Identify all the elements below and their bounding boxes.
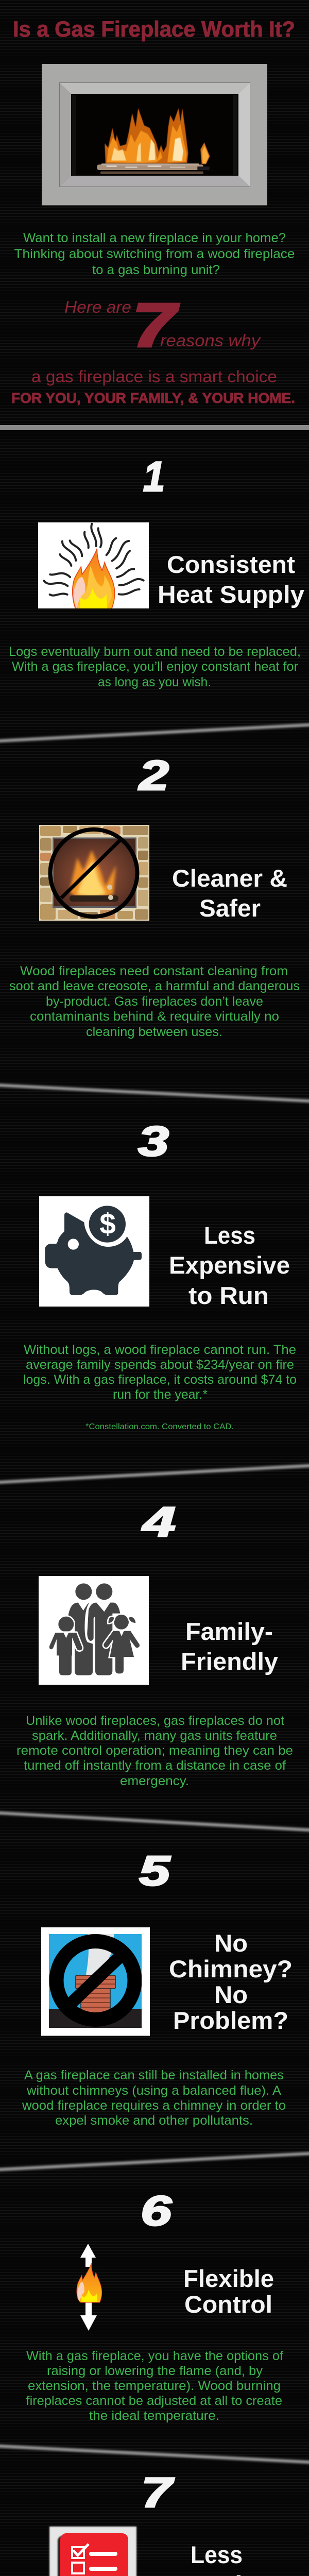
- icon: piggy bank: $: [99, 1208, 116, 1241]
- body text: by-product. Gas fireplaces don’t leave: [46, 994, 263, 1009]
- body text: extension, the temperature). Wood burning: [28, 2379, 281, 2393]
- body text: [16, 1714, 293, 1788]
- body text: Unlike wood fireplaces, gas fireplaces do not: [26, 1714, 284, 1728]
- heading: Less: [191, 2541, 243, 2568]
- body text: logs. With a gas fireplace, it costs around $74 to: [23, 1372, 297, 1387]
- panel: reason 6: [26, 2188, 283, 2423]
- body text: without chimneys (using a balanced flue). A: [26, 2083, 281, 2098]
- intro text: [14, 231, 295, 277]
- heading: Heat Supply: [158, 581, 304, 608]
- icon: family: [39, 1576, 149, 1685]
- subheading: smart choice: a gas fireplace is a smart choice: [31, 367, 277, 386]
- heading: Flexible: [183, 2265, 274, 2292]
- body text: emergency.: [120, 1774, 189, 1788]
- heading: Less: [204, 1222, 255, 1249]
- intro text: Thinking about switching from a wood fireplace: [14, 247, 295, 261]
- body text: the ideal temperature.: [89, 2409, 219, 2423]
- body text: contaminants behind & require virtually no: [30, 1009, 279, 1024]
- heading: No: [214, 1929, 248, 1957]
- body text: wood fireplace requires a chimney in order to: [22, 2098, 286, 2113]
- body text: Logs eventually burn out and need to be replaced,: [9, 645, 301, 659]
- body text: [23, 1343, 297, 1402]
- body text: remote control operation; meaning they can be: [16, 1743, 293, 1758]
- heading: Control: [184, 2291, 272, 2318]
- number 1: 1: [143, 453, 165, 500]
- panel: reason 1: [9, 453, 304, 689]
- title: Is a Gas Fireplace Worth It?: [13, 17, 295, 42]
- panel: reason 4: [16, 1499, 293, 1788]
- body text: With a gas fireplace, you’ll enjoy constant heat for: [12, 659, 298, 674]
- flames mid: [107, 124, 209, 163]
- icon: red checklist: [49, 2527, 136, 2576]
- heading: [158, 551, 304, 608]
- icon: piggy bank: [39, 1196, 149, 1307]
- intro text: Want to install a new fireplace in your home?: [23, 231, 286, 245]
- heading: Cleaner &: [172, 865, 287, 892]
- heading: [183, 2541, 250, 2576]
- number 7: 7: [141, 2469, 174, 2516]
- body text: expel smoke and other pollutants.: [55, 2113, 253, 2128]
- heading: [172, 865, 287, 922]
- body text: [9, 645, 301, 689]
- number 2: 2: [138, 752, 169, 799]
- body text: [26, 2349, 283, 2423]
- heading: [169, 1929, 293, 2034]
- heading: [169, 1222, 290, 1309]
- body text: as long as you wish.: [98, 675, 211, 689]
- heading: No: [214, 1981, 248, 2008]
- flames outer: [105, 108, 210, 164]
- heading: Consistent: [167, 551, 295, 578]
- heading: Friendly: [181, 1648, 278, 1675]
- footnote: *Constellation.com. Converted to CAD.: [85, 1422, 234, 1431]
- body text: spark. Additionally, many gas units feature: [32, 1728, 277, 1743]
- heading: Chimney?: [169, 1955, 293, 1982]
- icon: crossed-out wood fireplace: [39, 825, 149, 921]
- intro text: to a gas burning unit?: [92, 263, 220, 277]
- icon: flame with heat waves: [38, 522, 149, 609]
- heading: Family-: [185, 1618, 273, 1645]
- heading: here are 7 reasons why: 7: [132, 291, 179, 360]
- body text: A gas fireplace can still be installed in homes: [24, 2068, 284, 2082]
- body text: soot and leave creosote, a harmful and dangerous: [9, 979, 300, 993]
- body text: turned off instantly from a distance in case of: [24, 1758, 286, 1773]
- body text: average family spends about $234/year on fire: [26, 1358, 294, 1372]
- heading: here are 7 reasons why: Here are: [64, 298, 131, 316]
- body text: [22, 2068, 286, 2128]
- subheading: smart choice: FOR YOU, YOUR FAMILY, & YOUR HOME.: [11, 390, 295, 406]
- icon: flame with up and down arrows: [77, 2244, 102, 2331]
- image: gas fireplace: [42, 64, 267, 205]
- panel: reason 5: [22, 1848, 293, 2128]
- body text: fireplaces cannot be adjusted at all to create: [26, 2394, 282, 2408]
- number 6: 6: [141, 2188, 173, 2234]
- heading: [183, 2265, 274, 2318]
- heading: Problem?: [173, 2007, 288, 2034]
- body text: raising or lowering the flame (and, by: [47, 2364, 263, 2378]
- number 4: 4: [141, 1499, 176, 1546]
- body text: With a gas fireplace, you have the options of: [26, 2349, 283, 2363]
- body text: Wood fireplaces need constant cleaning from: [20, 964, 288, 978]
- heading: [181, 1618, 278, 1675]
- heading: here are 7 reasons why: reasons why: [160, 331, 261, 350]
- panel: reason 7: [16, 2469, 291, 2576]
- heading: Safer: [199, 894, 261, 922]
- icon: crossed-out chimney: [41, 1927, 150, 2036]
- number 5: 5: [139, 1848, 171, 1894]
- body text: Without logs, a wood fireplace cannot run. The: [24, 1343, 296, 1357]
- flames core: [111, 138, 183, 161]
- number 3: 3: [138, 1118, 169, 1165]
- body text: [9, 964, 300, 1039]
- panel: reason 3: [23, 1118, 297, 1431]
- rocks: [96, 163, 213, 174]
- heading: to Run: [188, 1282, 269, 1309]
- body text: cleaning between uses.: [86, 1025, 222, 1039]
- panel: reason 2: [9, 752, 300, 1039]
- heading: here are 7 reasons why: [64, 291, 261, 360]
- subheading: smart choice: [11, 367, 295, 406]
- body text: run for the year.*: [113, 1387, 208, 1402]
- heading: Expensive: [169, 1251, 290, 1279]
